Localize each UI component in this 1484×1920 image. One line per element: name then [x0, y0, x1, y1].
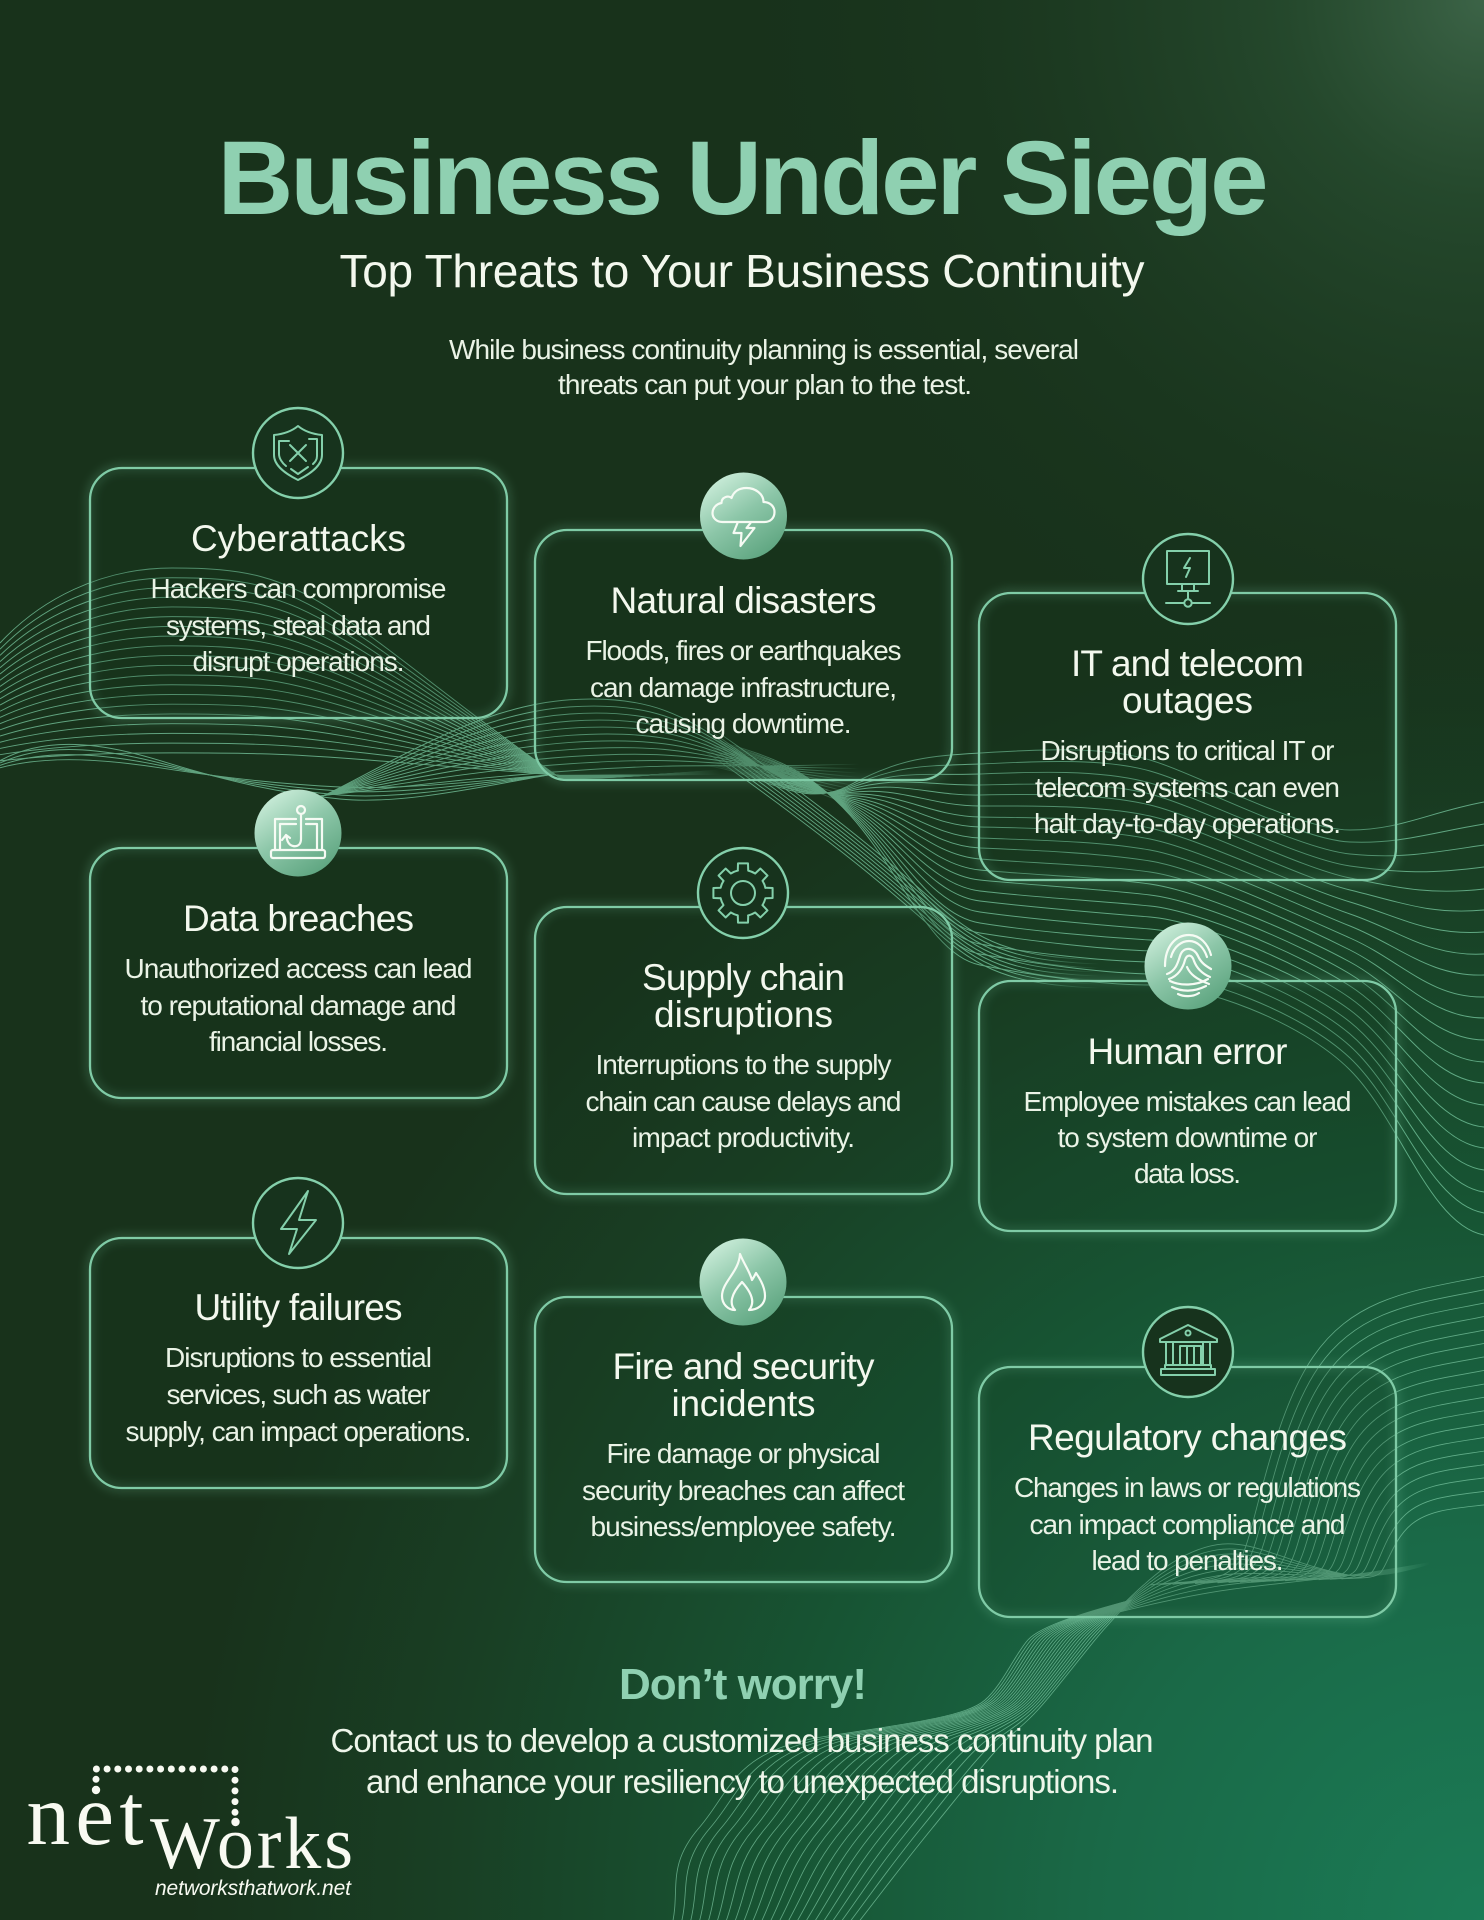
heading: IT and telecom outages: outages [1122, 680, 1253, 721]
panel: Supply chain disruptions [535, 848, 952, 1194]
body: Human error: to system downtime or [1058, 1122, 1318, 1153]
body: Human error [1024, 1086, 1352, 1189]
body: Regulatory changes: Changes in laws or regulations [1014, 1472, 1361, 1503]
heading: Natural disasters: Natural disasters [610, 580, 876, 621]
icon: gear [698, 848, 788, 938]
heading: IT and telecom outages [1071, 643, 1304, 721]
body: Supply chain disruptions: impact productivity. [632, 1122, 855, 1153]
body: IT and telecom outages [1034, 735, 1341, 839]
body: Utility failures: Disruptions to essential [165, 1342, 432, 1373]
icon: government building [1143, 1307, 1233, 1397]
heading: Supply chain disruptions: disruptions [654, 994, 833, 1035]
logo: netWorks: Works [150, 1803, 353, 1885]
heading: Fire and security incidents: Fire and security [612, 1346, 875, 1387]
panel: Regulatory changes [979, 1307, 1396, 1617]
body: Cyberattacks: disrupt operations. [192, 646, 404, 677]
icon: flame [700, 1238, 786, 1326]
panel: Cyberattacks [90, 408, 507, 718]
heading: Utility failures: Utility failures [194, 1287, 402, 1328]
body: Supply chain disruptions: chain can cause delays and [586, 1086, 902, 1117]
body: Data breaches [124, 953, 472, 1057]
body: Supply chain disruptions [586, 1049, 902, 1153]
callout text: and enhance your resiliency to unexpected disruptions. [366, 1763, 1119, 1800]
callout heading: Don’t worry! [619, 1660, 867, 1709]
intro text: While business continuity planning is essential, several [449, 334, 1079, 365]
subtitle: Top Threats to Your Business Continuity [340, 245, 1144, 297]
icon: shield with x [253, 408, 343, 498]
panel: Data breaches [90, 790, 507, 1098]
body: Regulatory changes: can impact compliance and [1030, 1509, 1346, 1540]
body: IT and telecom outages: telecom systems can even [1035, 772, 1340, 803]
body: Utility failures: services, such as water [166, 1379, 430, 1410]
body: Cyberattacks [150, 573, 446, 677]
icon: storm cloud [700, 472, 787, 560]
panel: Utility failures [90, 1178, 507, 1488]
icon: monitor with bolt [1143, 534, 1233, 624]
body: Human error: data loss. [1134, 1158, 1241, 1189]
body: Fire and security incidents: security breaches can affect [582, 1475, 905, 1506]
body: Fire and security incidents: business/employee safety. [590, 1511, 896, 1542]
heading: Human error: Human error [1088, 1031, 1288, 1072]
body: IT and telecom outages: halt day-to-day operations. [1034, 808, 1341, 839]
body: Natural disasters: causing downtime. [636, 708, 852, 739]
logo: netWorks [26, 1766, 353, 1900]
intro text [449, 334, 1079, 400]
title: Business Under Siege [218, 120, 1268, 237]
body: Supply chain disruptions: Interruptions to the supply [596, 1049, 892, 1080]
heading: Supply chain disruptions [642, 957, 845, 1035]
body: Natural disasters [586, 635, 902, 739]
callout text [330, 1722, 1154, 1800]
body: Fire and security incidents [582, 1438, 905, 1542]
body: Regulatory changes [1014, 1472, 1361, 1576]
body: IT and telecom outages: Disruptions to critical IT or [1040, 735, 1334, 766]
body: Utility failures: supply, can impact operations. [126, 1416, 472, 1447]
heading: Supply chain disruptions: Supply chain [642, 957, 845, 998]
body: Cyberattacks: Hackers can compromise [150, 573, 446, 604]
panel: Natural disasters [535, 472, 952, 780]
body: Utility failures [126, 1342, 472, 1447]
body: Regulatory changes: lead to penalties. [1092, 1545, 1284, 1576]
panel: Fire and security incidents [535, 1238, 952, 1582]
callout text: Contact us to develop a customized business continuity plan [330, 1722, 1154, 1759]
body: Fire and security incidents: Fire damage or physical [606, 1438, 880, 1469]
heading: Data breaches: Data breaches [183, 898, 414, 939]
heading: Fire and security incidents [612, 1346, 875, 1424]
body: Human error: Employee mistakes can lead [1024, 1086, 1352, 1117]
panel: IT and telecom outages [979, 534, 1396, 880]
body: Cyberattacks: systems, steal data and [166, 610, 431, 641]
body: Data breaches: to reputational damage and [140, 990, 456, 1021]
icon: fingerprint [1144, 922, 1232, 1010]
logo: netWorks: networksthatwork.net [155, 1877, 352, 1900]
heading: IT and telecom outages: IT and telecom [1071, 643, 1304, 684]
icon: lightning bolt [253, 1178, 343, 1268]
intro text: threats can put your plan to the test. [558, 369, 972, 400]
body: Natural disasters: can damage infrastructure, [590, 672, 897, 703]
logo: netWorks: net [26, 1766, 144, 1863]
icon: phishing hook on laptop [254, 790, 342, 876]
body: Natural disasters: Floods, fires or earthquakes [586, 635, 902, 666]
panel: Human error [979, 922, 1396, 1231]
body: Data breaches: Unauthorized access can lead [124, 953, 472, 984]
heading: Fire and security incidents: incidents [672, 1383, 816, 1424]
heading: Regulatory changes: Regulatory changes [1028, 1417, 1347, 1458]
body: Data breaches: financial losses. [209, 1026, 388, 1057]
heading: Cyberattacks: Cyberattacks [191, 518, 406, 559]
